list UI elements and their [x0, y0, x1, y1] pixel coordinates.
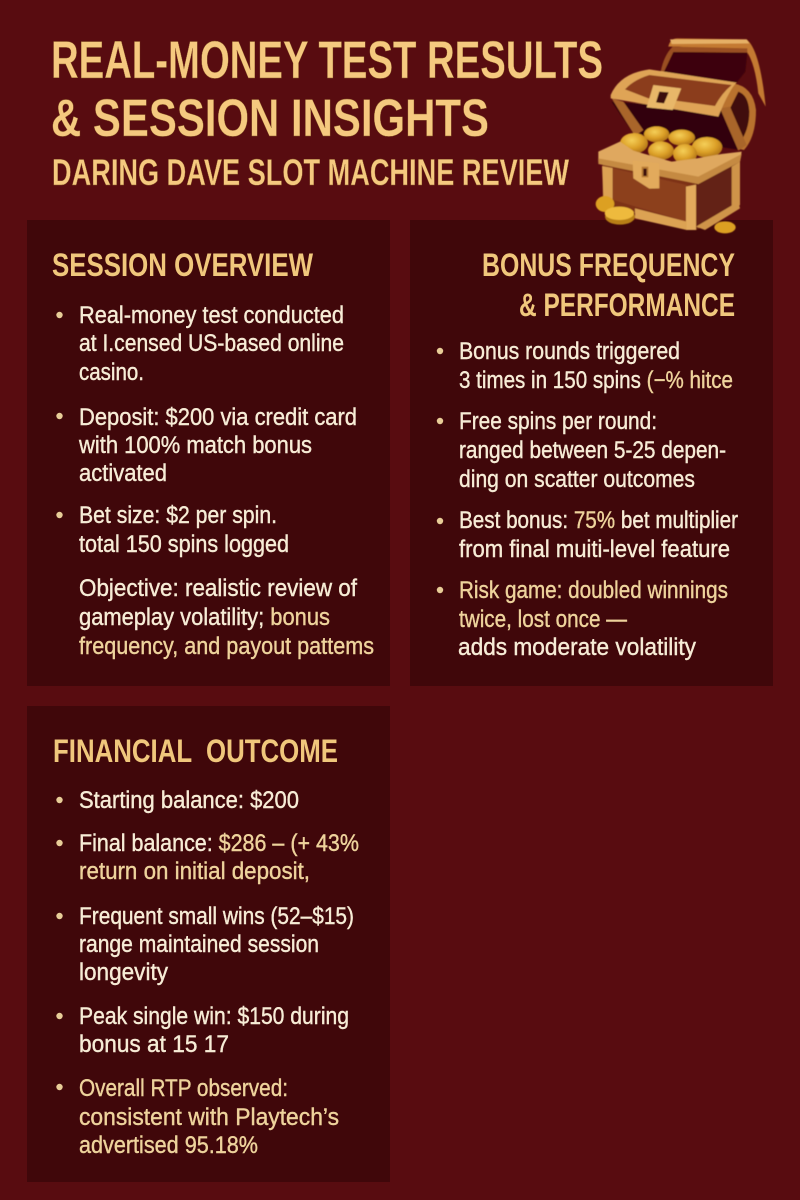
bullet: bonus rounds: 3 times in 150 spins (−% hitce [459, 367, 733, 394]
bullet: final balance: Final balance: $286 – (+ 43% [79, 830, 359, 857]
heading: session overview: SESSION OVERVIEW [52, 247, 314, 283]
bullet: risk game: adds moderate volatility [458, 634, 696, 661]
subtitle: DARING DAVE SLOT MACHINE REVIEW [52, 152, 569, 193]
panel: bonus frequency and performance [410, 220, 773, 686]
bullet: peak win: Peak single win: $150 during [79, 1003, 349, 1030]
panel: session overview [27, 220, 390, 686]
bullet: starting balance: Starting balance: $200 [79, 787, 299, 814]
heading: financial outcome: FINANCIAL OUTCOME [53, 733, 338, 769]
bullet: overall rtp [56, 1075, 339, 1159]
title: REAL-MONEY TEST RESULTS [51, 31, 603, 90]
bullet: test conducted [56, 302, 344, 386]
bullet: peak win: bonus at 15 17 [79, 1031, 229, 1058]
side hoop of front lid [722, 83, 756, 150]
bullet: final balance [56, 830, 359, 885]
loose coins [596, 196, 736, 233]
bullet: small wins: range maintained session [79, 931, 319, 958]
bullet: deposit [56, 404, 357, 487]
bullet: small wins [56, 903, 354, 986]
bullet: best bonus: from final muiti-level feature [459, 536, 730, 563]
lid clasp [647, 85, 681, 110]
icon: treasure chest [596, 38, 766, 233]
bullet: free spins [437, 408, 726, 493]
gold coins [620, 126, 722, 164]
bullet: free spins: Free spins per round: [459, 408, 657, 435]
bullet: risk game [437, 577, 728, 661]
bullet: overall rtp: Overall RTP observed: [79, 1075, 288, 1102]
title [51, 31, 603, 148]
bullet: bet size: Bet size: $2 per spin. [79, 502, 277, 529]
chest front and side [603, 163, 697, 230]
back lid [668, 38, 766, 107]
bullet: risk game: twice, lost once — [459, 606, 627, 633]
bullet: free spins: ranged between 5-25 depen- [459, 437, 726, 464]
bullet: best bonus: Best bonus: 75% bet multiplier [459, 507, 738, 534]
heading: bonus frequency [482, 247, 735, 323]
bullet: bet size: total 150 spins logged [79, 531, 289, 558]
chest rim [598, 142, 742, 184]
bullet: final balance: return on initial deposit, [79, 858, 310, 885]
bullet: peak win [56, 1003, 349, 1058]
heading: bonus frequency: BONUS FREQUENCY [482, 247, 735, 283]
bullet: test conducted: at I.censed US-based online [79, 330, 344, 357]
objective text [79, 575, 374, 660]
chest interior [612, 102, 740, 150]
bullet: free spins: ding on scatter outcomes [459, 466, 695, 493]
front lid [611, 69, 737, 117]
bullet: deposit: activated [79, 460, 167, 487]
bullet: best bonus [437, 507, 738, 563]
bullet: test conducted: casino. [79, 359, 144, 386]
bullet: test conducted: Real-money test conducted [79, 302, 344, 329]
objective text: gameplay volatility; bonus [79, 604, 330, 631]
bullet: overall rtp: advertised 95.18% [79, 1132, 258, 1159]
bullet: deposit: Deposit: $200 via credit card [79, 404, 357, 431]
bullet: bonus rounds [437, 338, 733, 394]
bullet: risk game: Risk game: doubled winnings [459, 577, 728, 604]
heading: bonus frequency: & PERFORMANCE [519, 287, 735, 323]
front latch [633, 161, 659, 189]
title: & SESSION INSIGHTS [51, 89, 489, 148]
objective text: frequency, and payout pattems [79, 633, 374, 660]
panel: financial outcome [27, 706, 390, 1182]
bullet: bet size [56, 502, 289, 558]
bullet: small wins: Frequent small wins (52–$15) [79, 903, 354, 930]
bullet: overall rtp: consistent with Playtech’s [79, 1104, 339, 1131]
bullet: bonus rounds: Bonus rounds triggered [459, 338, 680, 365]
chest corner bands [602, 166, 613, 200]
objective text: Objective: realistic review of [79, 575, 357, 602]
bullet: small wins: longevity [79, 959, 168, 986]
bullet: deposit: with 100% match bonus [78, 432, 312, 459]
